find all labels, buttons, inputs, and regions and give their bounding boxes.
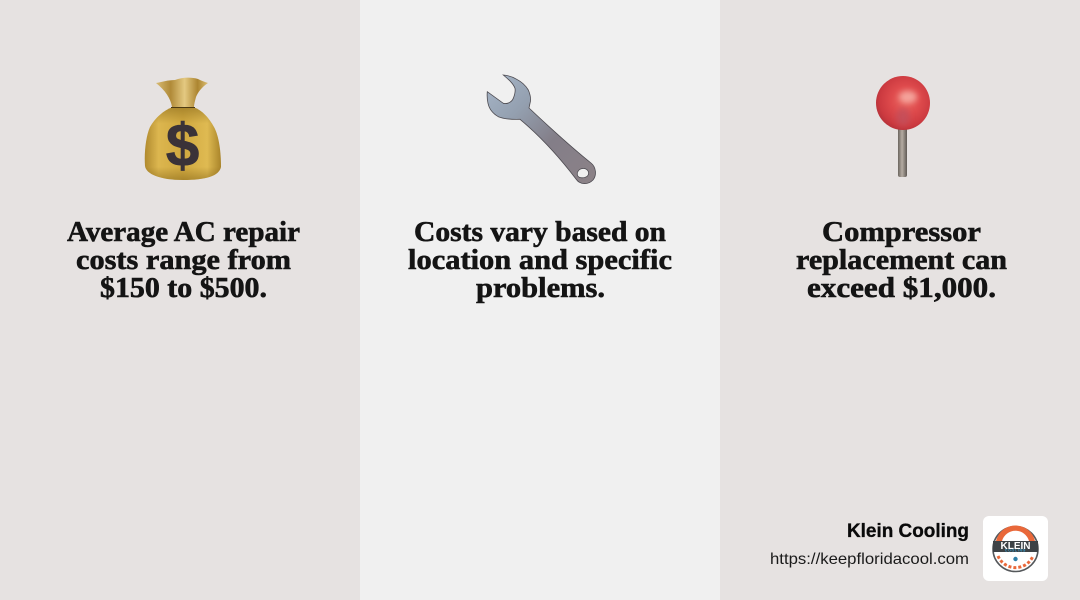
heading: average cost: Average AC repair [67,216,300,248]
heading: average cost: costs range from [76,244,291,276]
heading: compressor cost [796,216,1007,304]
panel: average cost [0,0,360,600]
heading: average cost [67,216,300,304]
heading: compressor cost: Compressor [822,216,981,248]
heading: average cost: $150 to $500. [100,272,267,304]
website url: https://keepfloridacool.com [770,551,969,568]
icon: round pushpin [876,76,930,177]
logo: Klein Cooling badge [983,516,1048,581]
icon: money bag [145,78,221,180]
heading: compressor cost: replacement can [796,244,1007,276]
heading: cost variation: Costs vary based on [414,216,666,248]
panel: cost variation [360,0,720,600]
brand name: Klein Cooling [847,520,969,542]
heading: cost variation: location and specific [408,244,672,276]
panel: compressor cost [720,0,1080,600]
logo: Klein Cooling badge: KLEIN [1000,540,1030,552]
heading: compressor cost: exceed $1,000. [807,272,996,304]
icon: money bag: $ [166,112,199,179]
heading: cost variation [408,216,672,304]
heading: cost variation: problems. [476,272,605,304]
logo: Klein Cooling badge: COOLING [1005,548,1026,552]
icon: wrench [487,75,595,184]
